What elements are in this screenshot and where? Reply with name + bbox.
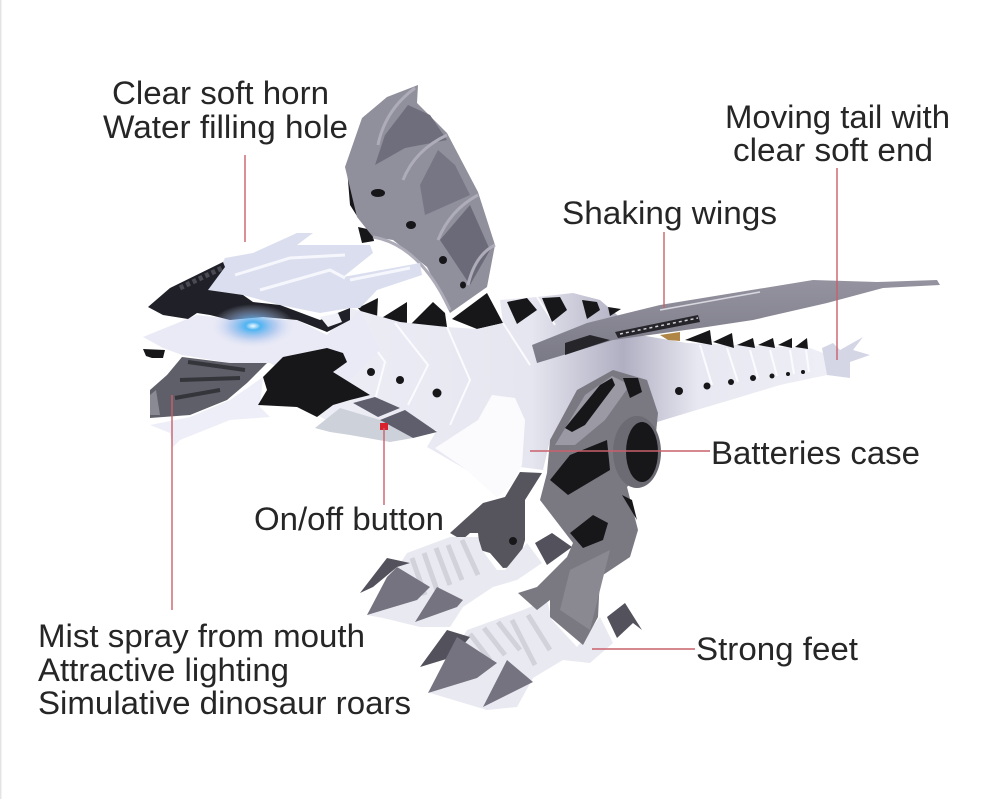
neck spikes [358, 293, 503, 329]
leader: feet [592, 648, 695, 650]
rear back spikes [507, 297, 621, 324]
back leg [450, 472, 572, 568]
label: button: On/off button [254, 501, 444, 537]
label: feet: Strong feet [696, 631, 858, 667]
eye glow [211, 304, 295, 348]
dark snout and head band [148, 262, 350, 332]
mouth with teeth [143, 349, 267, 418]
leader: tail [836, 168, 838, 360]
side diamonds [353, 397, 437, 438]
front leg and thigh [518, 370, 661, 645]
leader: wings [663, 232, 665, 308]
on/off red button [380, 423, 388, 430]
leader: button [383, 428, 385, 505]
white body and tail [290, 293, 827, 497]
dinosaur toy [143, 85, 940, 710]
label: batteries: Batteries case [711, 435, 920, 471]
leader: mouth [171, 395, 173, 610]
front foot with claws [420, 600, 642, 710]
label: tail [725, 99, 950, 168]
clear front arm [315, 408, 413, 442]
label: horn and water hole [103, 75, 348, 145]
horizontal wing [532, 280, 940, 363]
hip highlight [435, 395, 525, 497]
label: mouth features: Simulative dinosaur roars [38, 685, 411, 721]
leader: horn [244, 155, 246, 242]
white head [143, 310, 380, 400]
label: mouth features [38, 618, 411, 721]
head vent [180, 268, 222, 288]
upright wing [345, 85, 495, 313]
tail spikes [685, 330, 808, 349]
lower jaw [150, 377, 270, 447]
label: tail: clear soft end [733, 132, 933, 168]
label: mouth features: Mist spray from mouth [38, 618, 365, 654]
body panel lines [355, 297, 809, 425]
label: horn and water hole: Clear soft horn [112, 75, 329, 111]
label: mouth features: Attractive lighting [38, 652, 289, 688]
label: horn and water hole: Water filling hole [103, 109, 348, 145]
back foot with claws [360, 537, 542, 627]
batteries case [626, 422, 658, 482]
label: wings: Shaking wings [562, 195, 777, 231]
leader: batteries [530, 450, 710, 452]
clear tail tip [822, 337, 870, 378]
black cheek joint [258, 348, 370, 417]
label: tail: Moving tail with [725, 99, 950, 135]
body dots [367, 368, 805, 398]
clear soft horn [208, 233, 422, 313]
